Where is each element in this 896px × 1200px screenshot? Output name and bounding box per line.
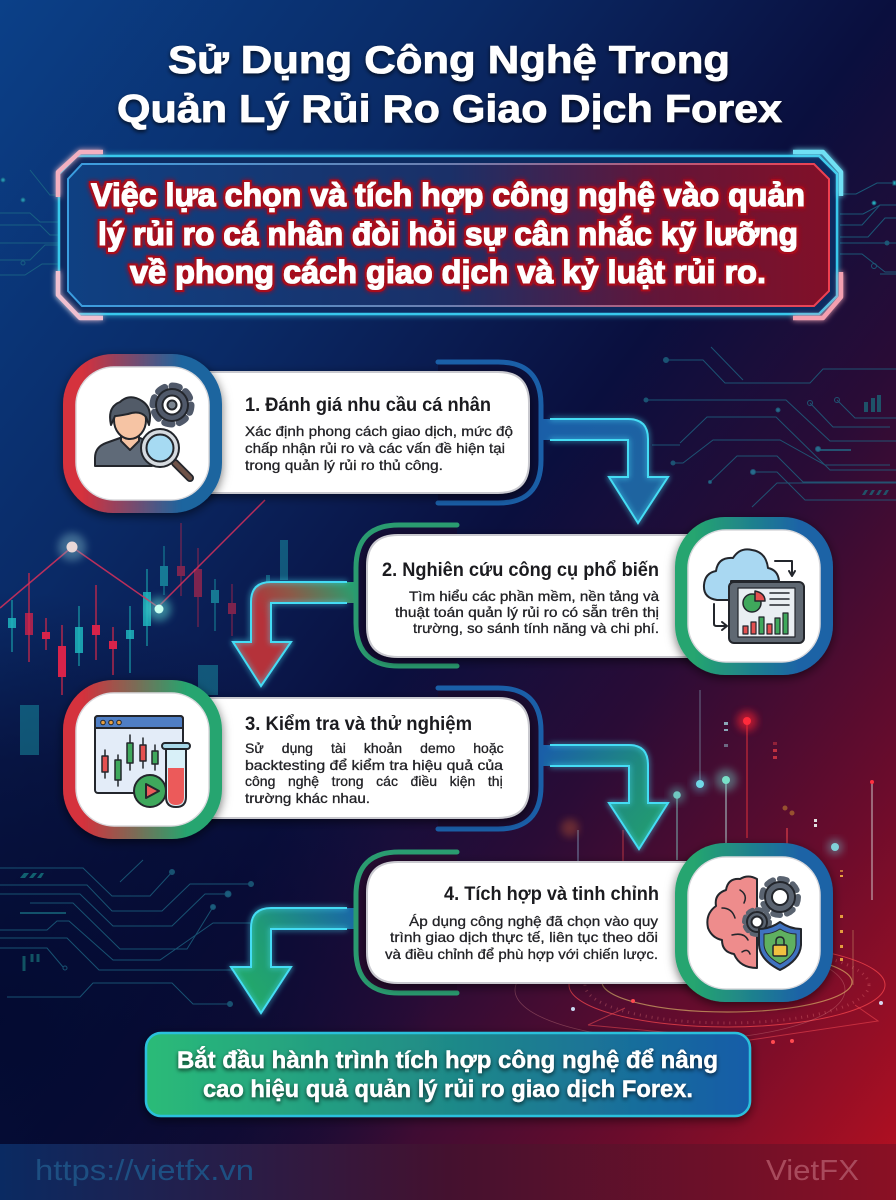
banner text [91, 177, 805, 290]
title: Sử Dụng Công Nghệ Trong [168, 39, 730, 82]
card [367, 862, 695, 983]
step 4 body: trình giao dịch thực tế, liên tục theo dõi [390, 929, 658, 945]
icon frame [63, 680, 222, 839]
icon tile [688, 857, 820, 989]
background: circuit lines bottom left [0, 860, 254, 1006]
step 2 body [395, 588, 659, 636]
icon tile [688, 530, 820, 662]
panel: step 3 [63, 680, 541, 839]
banner text: Việc lựa chọn và tích hợp công nghệ vào quản [91, 177, 805, 213]
panel: step 4 [356, 843, 833, 1002]
bracket [356, 525, 457, 666]
step 3 body: Sử dụng tài khoản demo hoặc [245, 740, 504, 756]
background: circuit lines top right [644, 347, 896, 507]
title: Quản Lý Rủi Ro Giao Dịch Forex [117, 88, 782, 131]
card [367, 535, 695, 657]
icon frame [675, 843, 833, 1002]
bracket [438, 688, 541, 829]
panel: closing call to action [146, 1033, 750, 1116]
icon: brain, gears and shield [707, 876, 801, 970]
step 2 body: Tìm hiểu các phần mềm, nền tảng và [409, 588, 659, 604]
arrow: step 3 to step 4 [541, 745, 668, 849]
arrow: step 2 to step 3 [233, 582, 356, 686]
call to action text: Bắt đầu hành trình tích hợp công nghệ để nâng [177, 1046, 718, 1074]
banner text: về phong cách giao dịch và kỷ luật rủi ro. [130, 254, 766, 290]
banner outer glow frame [59, 156, 837, 314]
background: banner side circuits [0, 170, 896, 275]
step 1 body: Xác định phong cách giao dịch, mức độ [245, 423, 513, 439]
background: candlestick chart [0, 500, 288, 755]
title [117, 39, 782, 131]
step 2 heading: 2. Nghiên cứu công cụ phổ biến [382, 560, 659, 581]
footer url: https://vietfx.vn [35, 1155, 254, 1187]
step 1 body [245, 423, 513, 473]
card [200, 698, 529, 818]
step 2 body: thuật toán quản lý rủi ro có sẵn trên thị [395, 604, 659, 620]
step 1 body: trong quản lý rủi ro thủ công. [245, 457, 443, 473]
panel: intro banner [58, 152, 841, 318]
icon frame [675, 517, 833, 675]
step 2 body: trường, so sánh tính năng và chi phí. [413, 620, 659, 636]
icon: person, gear and magnifier [95, 386, 191, 478]
icon frame [63, 354, 222, 513]
step 4 heading: 4. Tích hợp và tinh chỉnh [444, 884, 659, 905]
step 3 body: trường khác nhau. [245, 790, 370, 806]
call to action text [177, 1046, 718, 1103]
arrow: step 1 to step 2 [541, 419, 668, 523]
bracket [438, 362, 541, 503]
step 3 body [245, 740, 504, 806]
arrow: step 4 to closing call to action [231, 908, 356, 1013]
icon: chart window and test tube [95, 716, 190, 807]
step 4 body: Áp dụng công nghệ đã chọn vào quy [409, 913, 658, 929]
bracket [356, 852, 457, 993]
banner text: lý rủi ro cá nhân đòi hỏi sự cân nhắc kỹ lưỡng [98, 216, 798, 252]
step 3 body: công nghệ trong các điều kiện thị [245, 773, 503, 789]
footer bar [0, 1144, 896, 1200]
step 1 body: chấp nhận rủi ro và các vấn đề hiện tại [245, 440, 505, 456]
step 4 body: và điều chỉnh để phù hợp với chiến lược. [385, 946, 658, 962]
banner panel [68, 164, 829, 306]
call to action text: cao hiệu quả quản lý rủi ro giao dịch Forex. [203, 1076, 693, 1103]
icon: cloud and tablet dashboard [704, 549, 804, 643]
banner corner accents [58, 152, 841, 318]
step 1 heading: 1. Đánh giá nhu cầu cá nhân [245, 395, 491, 416]
step 3 heading: 3. Kiểm tra và thử nghiệm [245, 714, 472, 735]
icon tile [76, 367, 209, 500]
step 3 body: backtesting để kiểm tra hiệu quả của [245, 757, 503, 773]
step 4 body [385, 913, 658, 962]
footer brand: VietFX [766, 1155, 859, 1187]
card [200, 372, 529, 493]
background: light beacons [561, 690, 874, 985]
icon tile [76, 693, 209, 826]
panel: step 2 [356, 517, 833, 675]
background: holographic rings [515, 940, 885, 1044]
panel: step 1 [63, 354, 541, 513]
